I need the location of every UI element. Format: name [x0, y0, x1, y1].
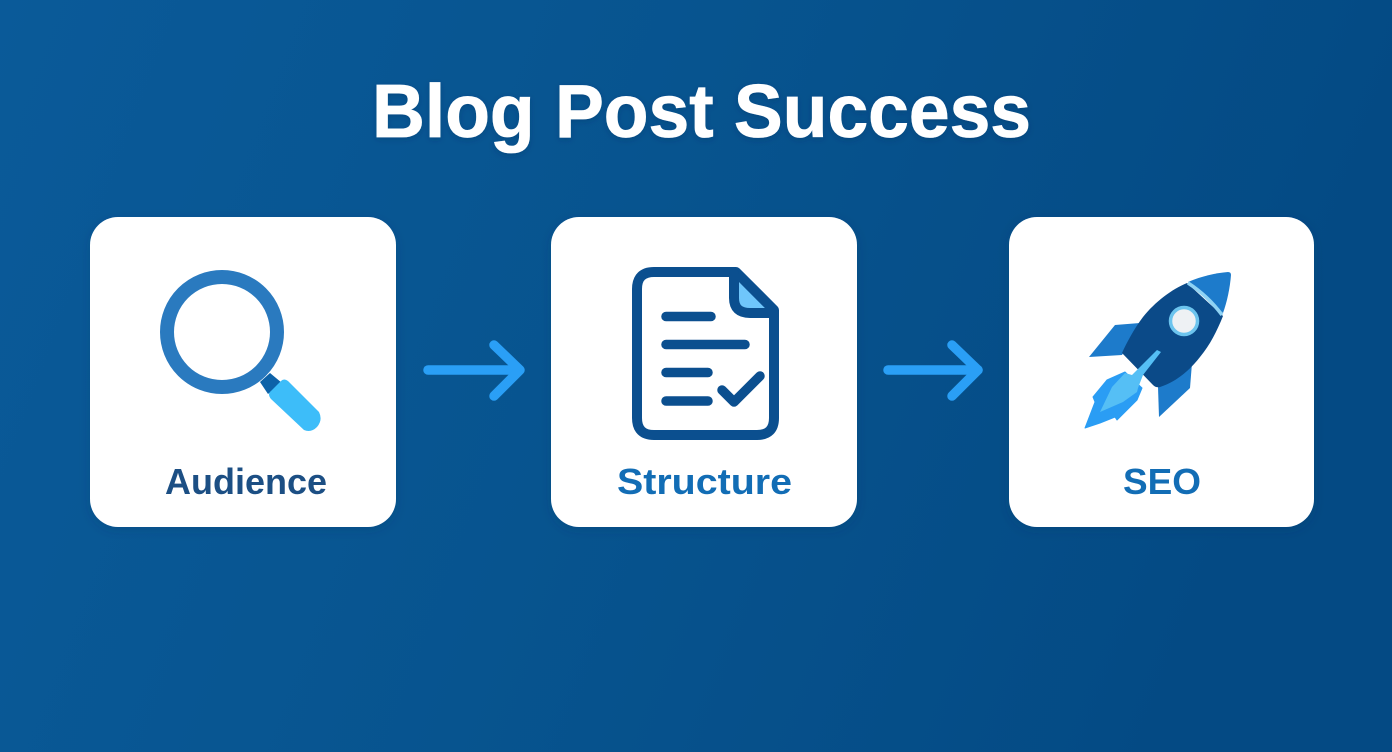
label: seo: SEO	[1123, 461, 1201, 502]
title: Blog Post Success	[372, 69, 1031, 153]
label: audience: Audience	[165, 461, 327, 502]
arrow: structure to seo	[888, 345, 978, 396]
label: structure: Structure	[617, 461, 792, 502]
arrow: audience to structure	[428, 345, 520, 396]
icon: rocket	[1085, 272, 1231, 428]
icon: magnifying glass	[167, 277, 321, 431]
panel: audience	[90, 217, 396, 527]
card: audience	[90, 217, 396, 527]
panel: seo	[1009, 217, 1314, 527]
icon: document with checkmark	[637, 272, 774, 435]
card: structure	[551, 217, 857, 527]
card: seo	[1009, 217, 1314, 527]
panel: structure	[551, 217, 857, 527]
